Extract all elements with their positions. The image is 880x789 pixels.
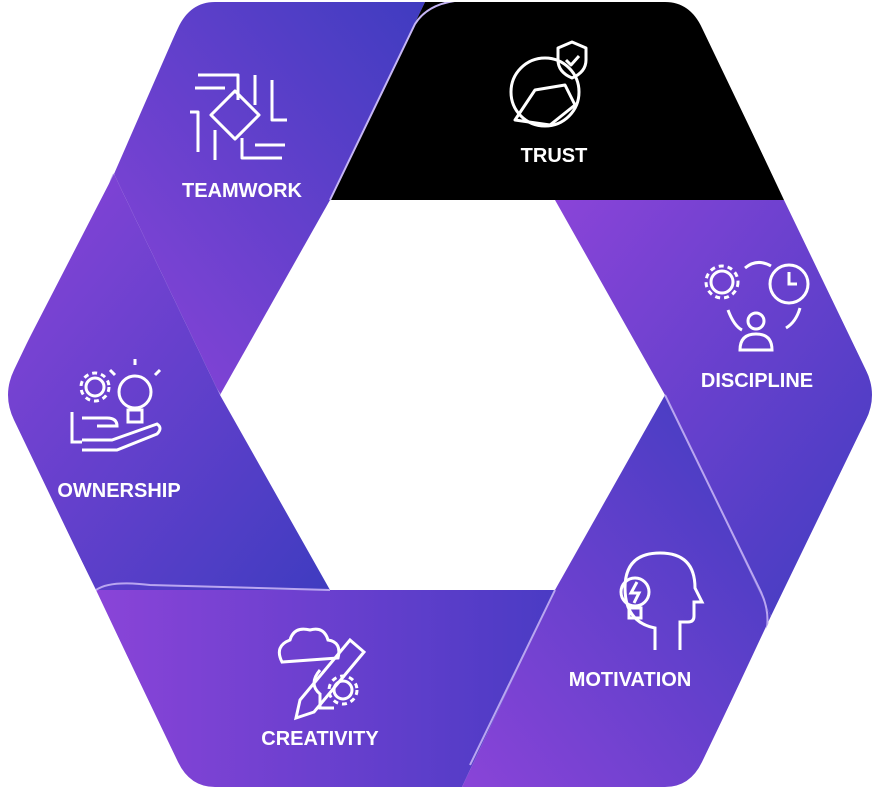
- panel: creativity: [96, 590, 555, 789]
- icon: trust handshake: [511, 42, 586, 126]
- label: trust: TRUST: [521, 145, 587, 167]
- label: discipline: DISCIPLINE: [701, 370, 813, 392]
- label: teamwork: TEAMWORK: [182, 180, 303, 202]
- icon: discipline: [706, 262, 808, 350]
- icon: creativity: [279, 629, 364, 718]
- panel: teamwork: [108, 0, 426, 395]
- label: ownership: OWNERSHIP: [57, 480, 181, 502]
- icon: ownership: [72, 359, 160, 450]
- label: creativity: CREATIVITY: [261, 728, 379, 750]
- panel: discipline: [555, 200, 878, 616]
- label: motivation: MOTIVATION: [569, 669, 691, 691]
- icon: teamwork hands: [190, 75, 287, 160]
- icon: motivation: [621, 553, 702, 650]
- panel: motivation: [461, 395, 771, 789]
- panel: trust: [330, 0, 784, 200]
- panel: ownership: [0, 174, 330, 590]
